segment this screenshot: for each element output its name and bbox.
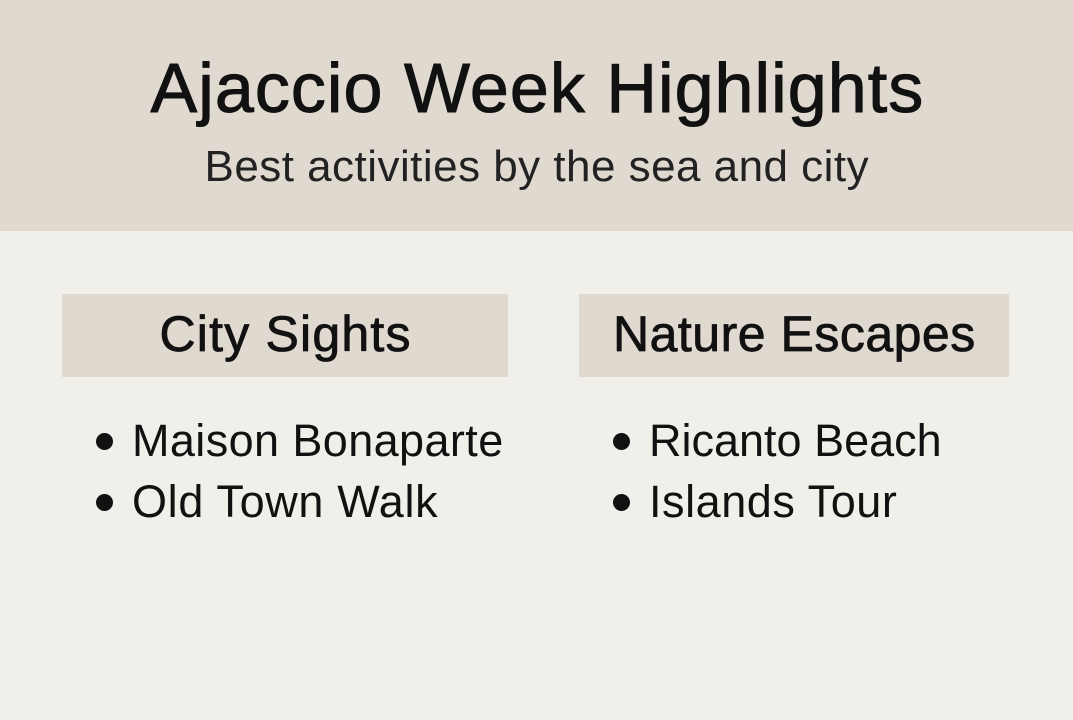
heading: nature escapes (579, 294, 1009, 377)
heading: nature escapes: Nature Escapes (613, 306, 976, 362)
panel: nature escapes (579, 294, 1009, 527)
heading: city sights (62, 294, 508, 377)
subtitle: Best activities by the sea and city (204, 142, 869, 190)
list item: Maison Bonaparte: Maison Bonaparte (132, 415, 504, 466)
list item: Old Town Walk: Old Town Walk (132, 476, 438, 527)
list item: Ricanto Beach: Ricanto Beach (649, 415, 942, 466)
header band (0, 0, 1073, 231)
panel: city sights (62, 294, 508, 527)
heading: city sights: City Sights (160, 306, 412, 362)
title: Ajaccio Week Highlights (150, 49, 924, 127)
list item: Islands Tour: Islands Tour (649, 476, 897, 527)
